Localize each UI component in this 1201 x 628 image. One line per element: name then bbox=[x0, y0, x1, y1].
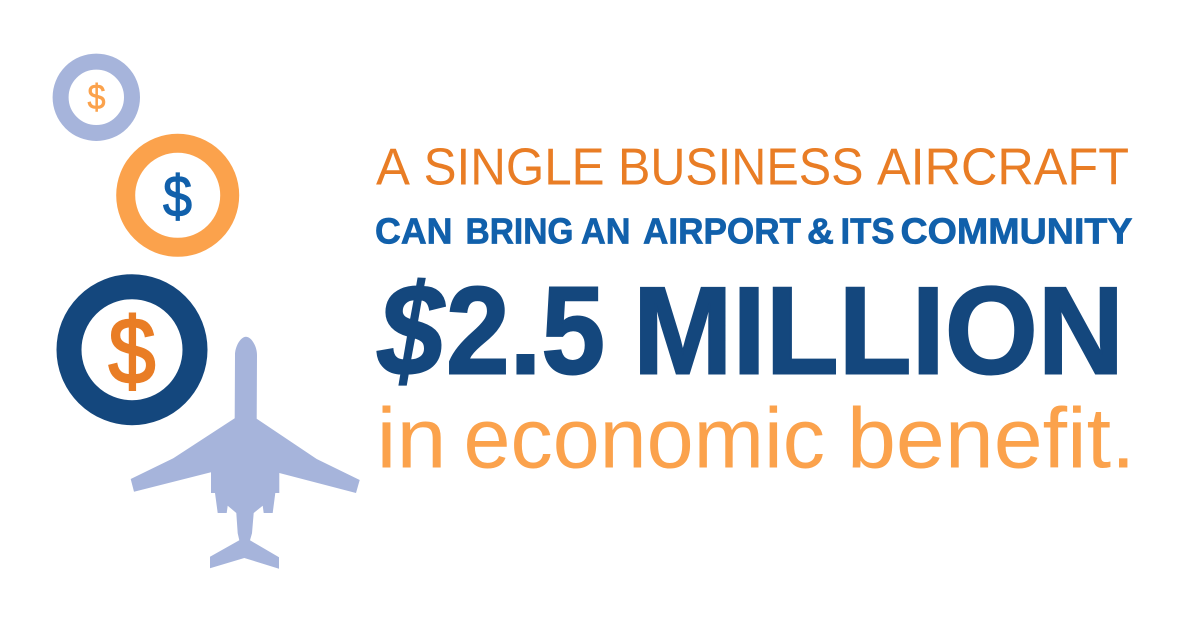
heading: a single business aircraft: A bbox=[376, 139, 410, 197]
heading: a single business aircraft bbox=[376, 139, 1129, 197]
subheading: can bring an airport and its community: & bbox=[807, 211, 834, 252]
subheading: can bring an airport and its community: CAN bbox=[375, 211, 452, 252]
heading: a single business aircraft: AIRCRAFT bbox=[877, 139, 1129, 197]
subheading: can bring an airport and its community: COMMUNITY bbox=[900, 211, 1132, 252]
subheading: can bring an airport and its community bbox=[375, 211, 1132, 252]
icon: medium orange coin bbox=[126, 143, 230, 247]
closing line: in economic benefit: in bbox=[376, 392, 446, 487]
headline figure: $2.5 million: $ bbox=[377, 257, 446, 403]
subheading: can bring an airport and its community: ITS bbox=[840, 211, 894, 252]
heading: a single business aircraft: BUSINESS bbox=[618, 139, 864, 197]
subheading: can bring an airport and its community: AIRPORT bbox=[643, 211, 801, 252]
headline figure: $2.5 million: 2.5 bbox=[446, 263, 605, 401]
closing line: in economic benefit: benefit. bbox=[847, 392, 1136, 487]
headline figure: $2.5 million bbox=[377, 257, 1124, 403]
closing line: in economic benefit: economic bbox=[464, 392, 825, 487]
icon: medium orange coin: $ bbox=[163, 164, 192, 229]
closing line: in economic benefit bbox=[376, 392, 1136, 487]
subheading: can bring an airport and its community: BRING bbox=[466, 211, 574, 252]
icon: large navy coin: $ bbox=[108, 298, 156, 403]
icon: airplane silhouette bbox=[131, 337, 360, 569]
headline figure: $2.5 million: MILLION bbox=[633, 263, 1124, 401]
icon: small periwinkle coin bbox=[61, 62, 132, 133]
icon: large navy coin bbox=[69, 287, 195, 413]
subheading: can bring an airport and its community: AN bbox=[581, 211, 630, 252]
icon: small periwinkle coin: $ bbox=[88, 78, 106, 117]
heading: a single business aircraft: SINGLE bbox=[424, 139, 605, 197]
